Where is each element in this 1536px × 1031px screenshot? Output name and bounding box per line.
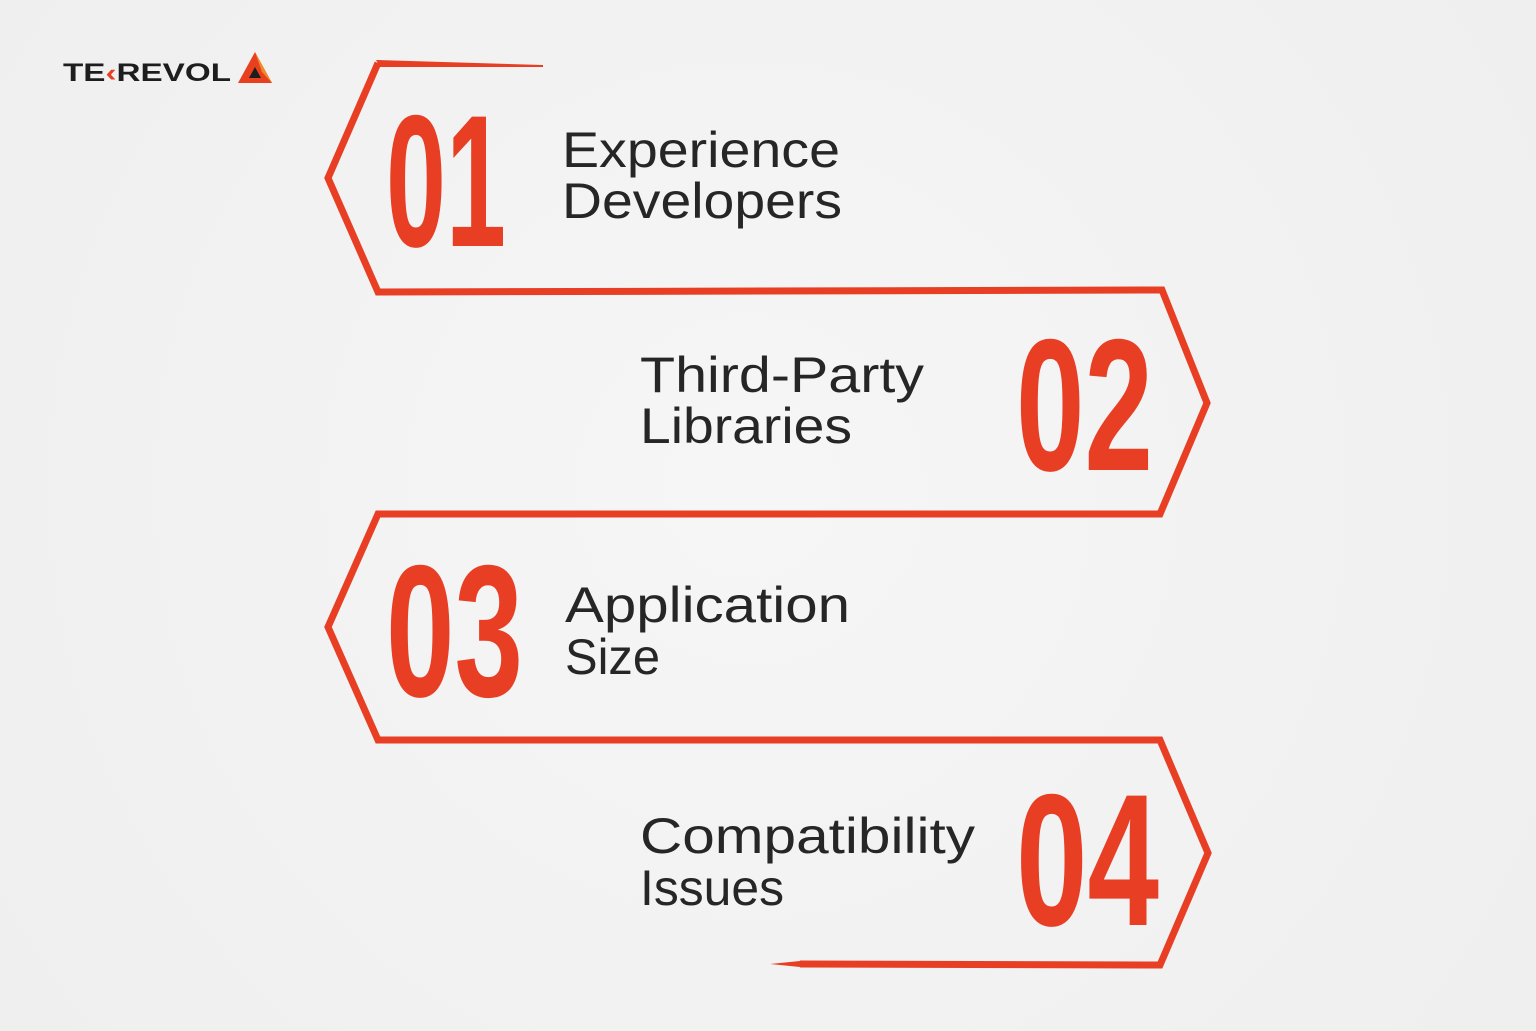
item 02: 02 bbox=[1016, 300, 1153, 510]
item 02: Libraries bbox=[640, 398, 852, 454]
item 02 bbox=[640, 300, 1153, 510]
item 03: 03 bbox=[386, 526, 523, 736]
logo bbox=[63, 52, 272, 87]
item 01: Developers bbox=[562, 173, 842, 229]
item 03: Application bbox=[565, 577, 850, 633]
item 01: Experience bbox=[562, 122, 840, 178]
ribbon frame bbox=[328, 60, 1208, 967]
item 01 bbox=[386, 76, 842, 286]
logo: TE ‹REVOL bbox=[63, 59, 231, 87]
item 01: 01 bbox=[386, 76, 506, 286]
item 03: Size bbox=[565, 629, 660, 685]
item 04: Compatibility bbox=[640, 808, 975, 864]
item 04: Issues bbox=[640, 860, 784, 916]
item 03 bbox=[386, 526, 850, 736]
item 04: 04 bbox=[1016, 755, 1159, 965]
item 02: Third-Party bbox=[640, 347, 924, 403]
item 04 bbox=[640, 755, 1159, 965]
